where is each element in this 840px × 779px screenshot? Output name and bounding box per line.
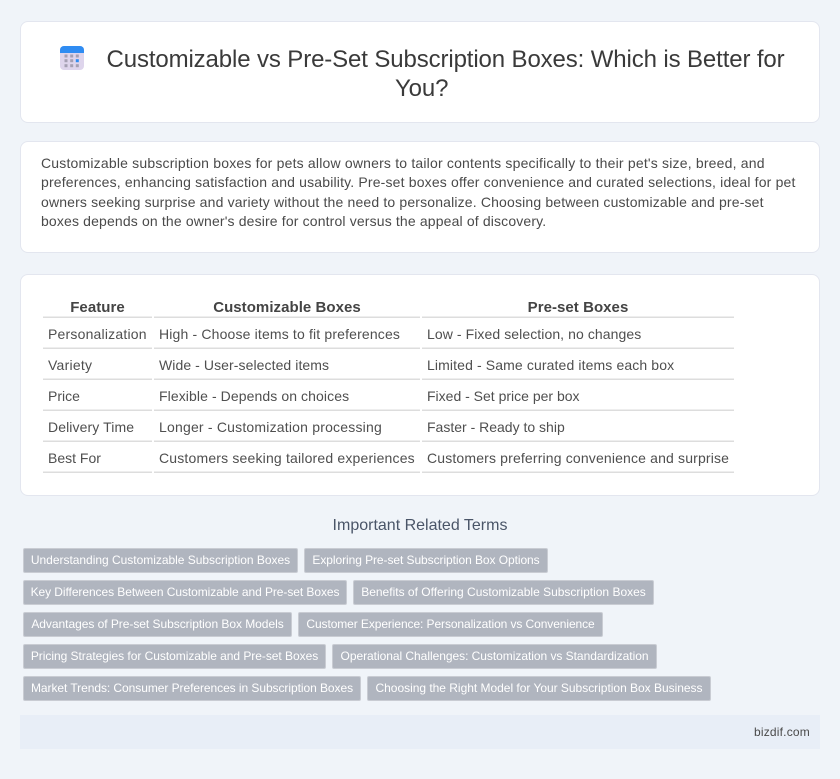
tag: Market Trends: Consumer Preferences in Subscription Boxes (31, 681, 353, 695)
tag (298, 612, 603, 637)
tag: Advantages of Pre-set Subscription Box Models (31, 617, 284, 631)
tag (23, 644, 326, 669)
intro paragraph: Customizable subscription boxes for pets allow owners to tailor contents specifically to their pet's size, breed, and (41, 155, 765, 171)
header: Feature: Feature (70, 299, 125, 316)
tag: Operational Challenges: Customization vs Standardization (341, 649, 648, 663)
cell: Flexible - Depends on choices (159, 388, 349, 404)
tag (332, 644, 657, 669)
tag: Customer Experience: Personalization vs Convenience (306, 617, 595, 631)
tag (304, 548, 548, 573)
tag (23, 676, 361, 701)
tag: Choosing the Right Model for Your Subscription Box Business (375, 681, 702, 695)
header: Customizable Boxes: Customizable Boxes (213, 299, 361, 316)
title line 1: Customizable vs Pre-Set Subscription Boxes: Which is Better for (106, 46, 785, 73)
tag: Exploring Pre-set Subscription Box Options (312, 553, 540, 567)
tag (367, 676, 711, 701)
tag: Pricing Strategies for Customizable and Pre-set Boxes (31, 649, 318, 663)
intro paragraph: owners seeking surprise and variety without the need to personalize. Choosing between customizable and pre-set (41, 194, 764, 210)
cell: Wide - User-selected items (159, 357, 329, 373)
footer bar (20, 715, 820, 749)
cell: Faster - Ready to ship (427, 419, 565, 435)
tag (23, 580, 347, 605)
title line 2: You? (395, 75, 448, 102)
cell: Customers preferring convenience and surprise (427, 450, 729, 466)
row: Best For: Best For (48, 450, 101, 466)
intro paragraph: preferences, enhancing satisfaction and usability. Pre-set boxes offer convenience and curated selections, ideal for pet (41, 174, 796, 190)
tag (23, 612, 292, 637)
intro paragraph (41, 155, 796, 229)
tag list (23, 548, 711, 701)
cell: Limited - Same curated items each box (427, 357, 674, 373)
panel: title card (20, 21, 820, 123)
cell: Fixed - Set price per box (427, 388, 580, 404)
tag: Key Differences Between Customizable and Pre-set Boxes (31, 585, 339, 599)
row: Personalization: Personalization (48, 326, 147, 342)
row: Delivery Time: Delivery Time (48, 419, 134, 435)
footer source text: bizdif.com (754, 725, 810, 739)
row: Price: Price (48, 388, 80, 404)
tag (23, 548, 298, 573)
cell: Low - Fixed selection, no changes (427, 326, 641, 342)
panel: comparison table card (20, 274, 820, 496)
header: Pre-set Boxes: Pre-set Boxes (528, 299, 628, 316)
tag: Understanding Customizable Subscription Boxes (31, 553, 290, 567)
comparison table (43, 299, 734, 473)
cell: Customers seeking tailored experiences (159, 450, 415, 466)
cell: High - Choose items to fit preferences (159, 326, 400, 342)
panel: intro card (20, 141, 820, 253)
row: Variety: Variety (48, 357, 92, 373)
cell: Longer - Customization processing (159, 419, 382, 435)
heading: Important Related Terms: Important Related Terms (333, 517, 507, 534)
tag: Benefits of Offering Customizable Subscription Boxes (361, 585, 646, 599)
tag (353, 580, 654, 605)
icon: calendar (60, 46, 84, 70)
intro paragraph: boxes depends on the owner's desire for control versus the appeal of discovery. (41, 213, 546, 229)
